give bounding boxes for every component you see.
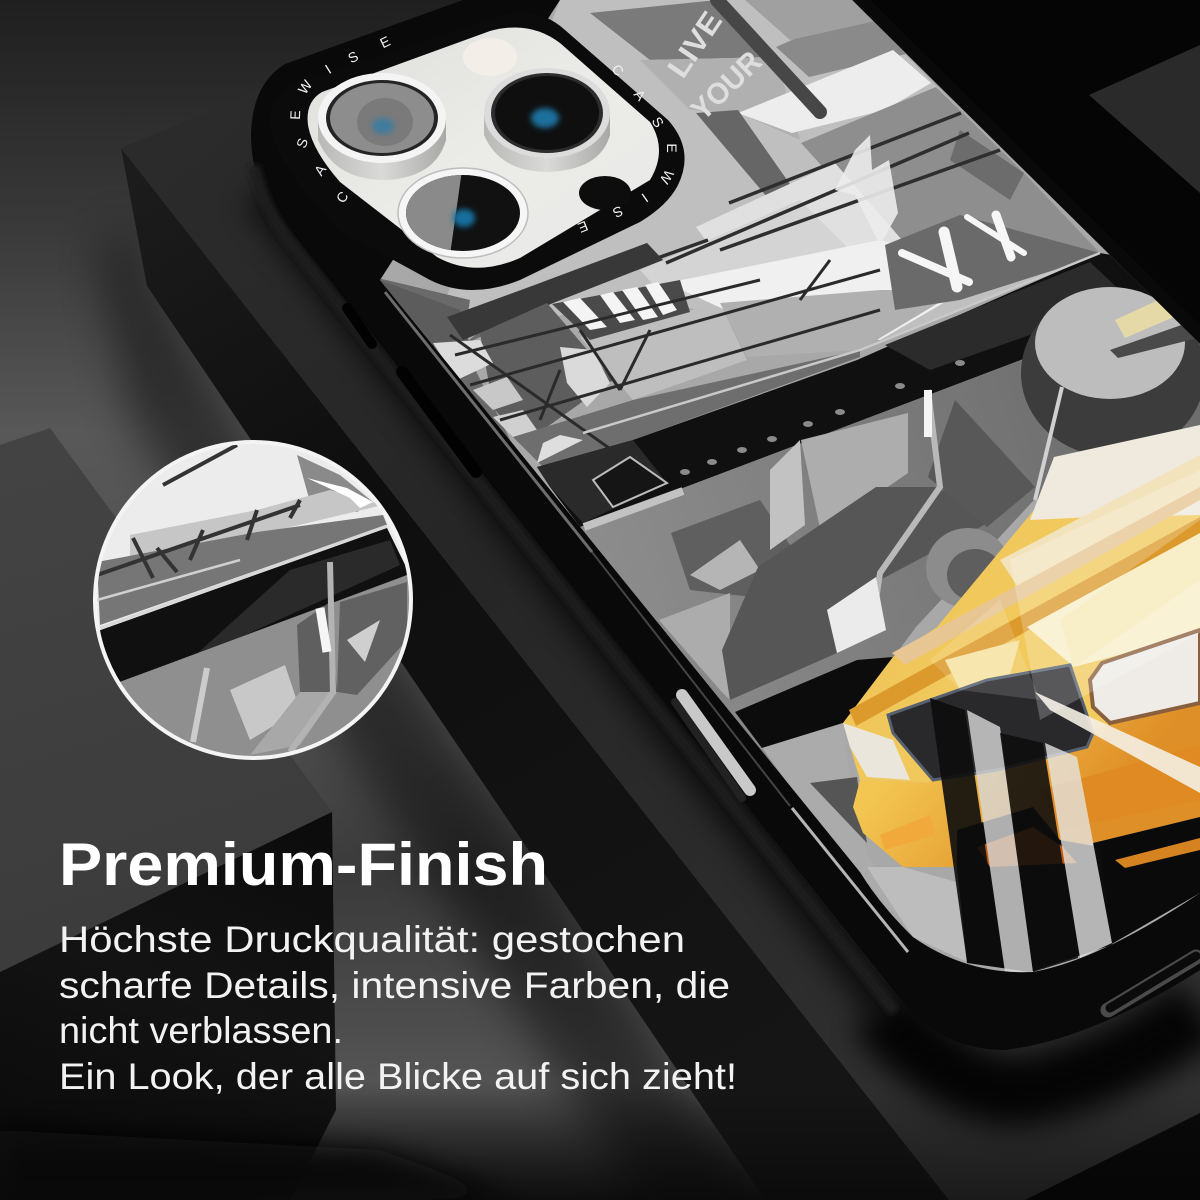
brand ring text: S	[293, 136, 311, 150]
case edge highlights	[385, 292, 908, 952]
artwork: bridge	[378, 135, 1200, 527]
inset black girder	[95, 528, 410, 690]
side button: volume	[402, 372, 476, 472]
body text	[59, 919, 737, 1097]
charging port	[1108, 956, 1196, 1010]
taxi hood	[843, 510, 1200, 783]
body text: scharfe Details, intensive Farben, die	[59, 965, 730, 1006]
camera island	[270, 13, 685, 290]
lens: top left	[318, 73, 446, 180]
girder rivets	[680, 360, 965, 475]
brand ring text: C	[333, 188, 351, 206]
microphone sensor	[579, 176, 631, 210]
brand ring text: E	[576, 218, 590, 236]
side window	[1090, 630, 1200, 723]
camera flash	[463, 38, 517, 76]
brand ring text: S	[649, 114, 667, 130]
taxi lower body	[853, 700, 1200, 867]
artwork: birds	[902, 215, 1024, 287]
brand ring text: S	[345, 48, 361, 66]
artwork: street scene	[580, 287, 1200, 962]
brand ring text: C	[609, 61, 627, 79]
phone printed artwork	[350, 0, 1200, 1000]
body text: nicht verblassen.	[59, 1010, 343, 1051]
brand ring text: W	[295, 76, 316, 97]
body text: Ein Look, der alle Blicke auf sich zieht!	[59, 1056, 737, 1097]
camera module plate	[308, 27, 659, 268]
artwork: upper posters	[430, 0, 1100, 340]
brand ring text: E	[287, 110, 303, 120]
lens: bottom	[398, 168, 528, 258]
poster lettering: LIVE	[661, 6, 729, 84]
lens: top right	[484, 68, 610, 172]
artwork: upper posters: YOUR	[685, 45, 769, 127]
side button: upper	[347, 308, 372, 344]
artwork: racing stripes	[930, 692, 1200, 972]
brand ring text: E	[664, 143, 680, 153]
brand ring text	[287, 33, 680, 236]
brand ring text: A	[631, 86, 650, 104]
brand ring text: W	[656, 167, 677, 188]
brand ring text: A	[311, 161, 330, 178]
body text: Höchste Druckqualität: gestochen	[59, 919, 685, 960]
inset truss lines	[97, 445, 300, 578]
side button: power	[675, 695, 750, 798]
camera ring	[270, 13, 685, 290]
big wheel	[1021, 287, 1200, 457]
crosswalk stripes	[552, 280, 690, 340]
artwork: glass reflections	[930, 470, 1200, 720]
heading: Premium-Finish	[59, 831, 548, 898]
phone case body	[251, 0, 1200, 1050]
brand ring text: E	[377, 33, 393, 51]
windshield	[888, 665, 1093, 780]
brand ring text: I	[322, 61, 334, 77]
under car shadow	[1093, 817, 1200, 945]
artwork: yellow taxi	[843, 425, 1200, 972]
inset street	[120, 575, 409, 756]
inset: magnified detail circle	[90, 440, 420, 760]
black bridge girder	[537, 253, 1200, 527]
brand ring text: I	[639, 190, 651, 206]
brand ring text: S	[610, 203, 626, 221]
